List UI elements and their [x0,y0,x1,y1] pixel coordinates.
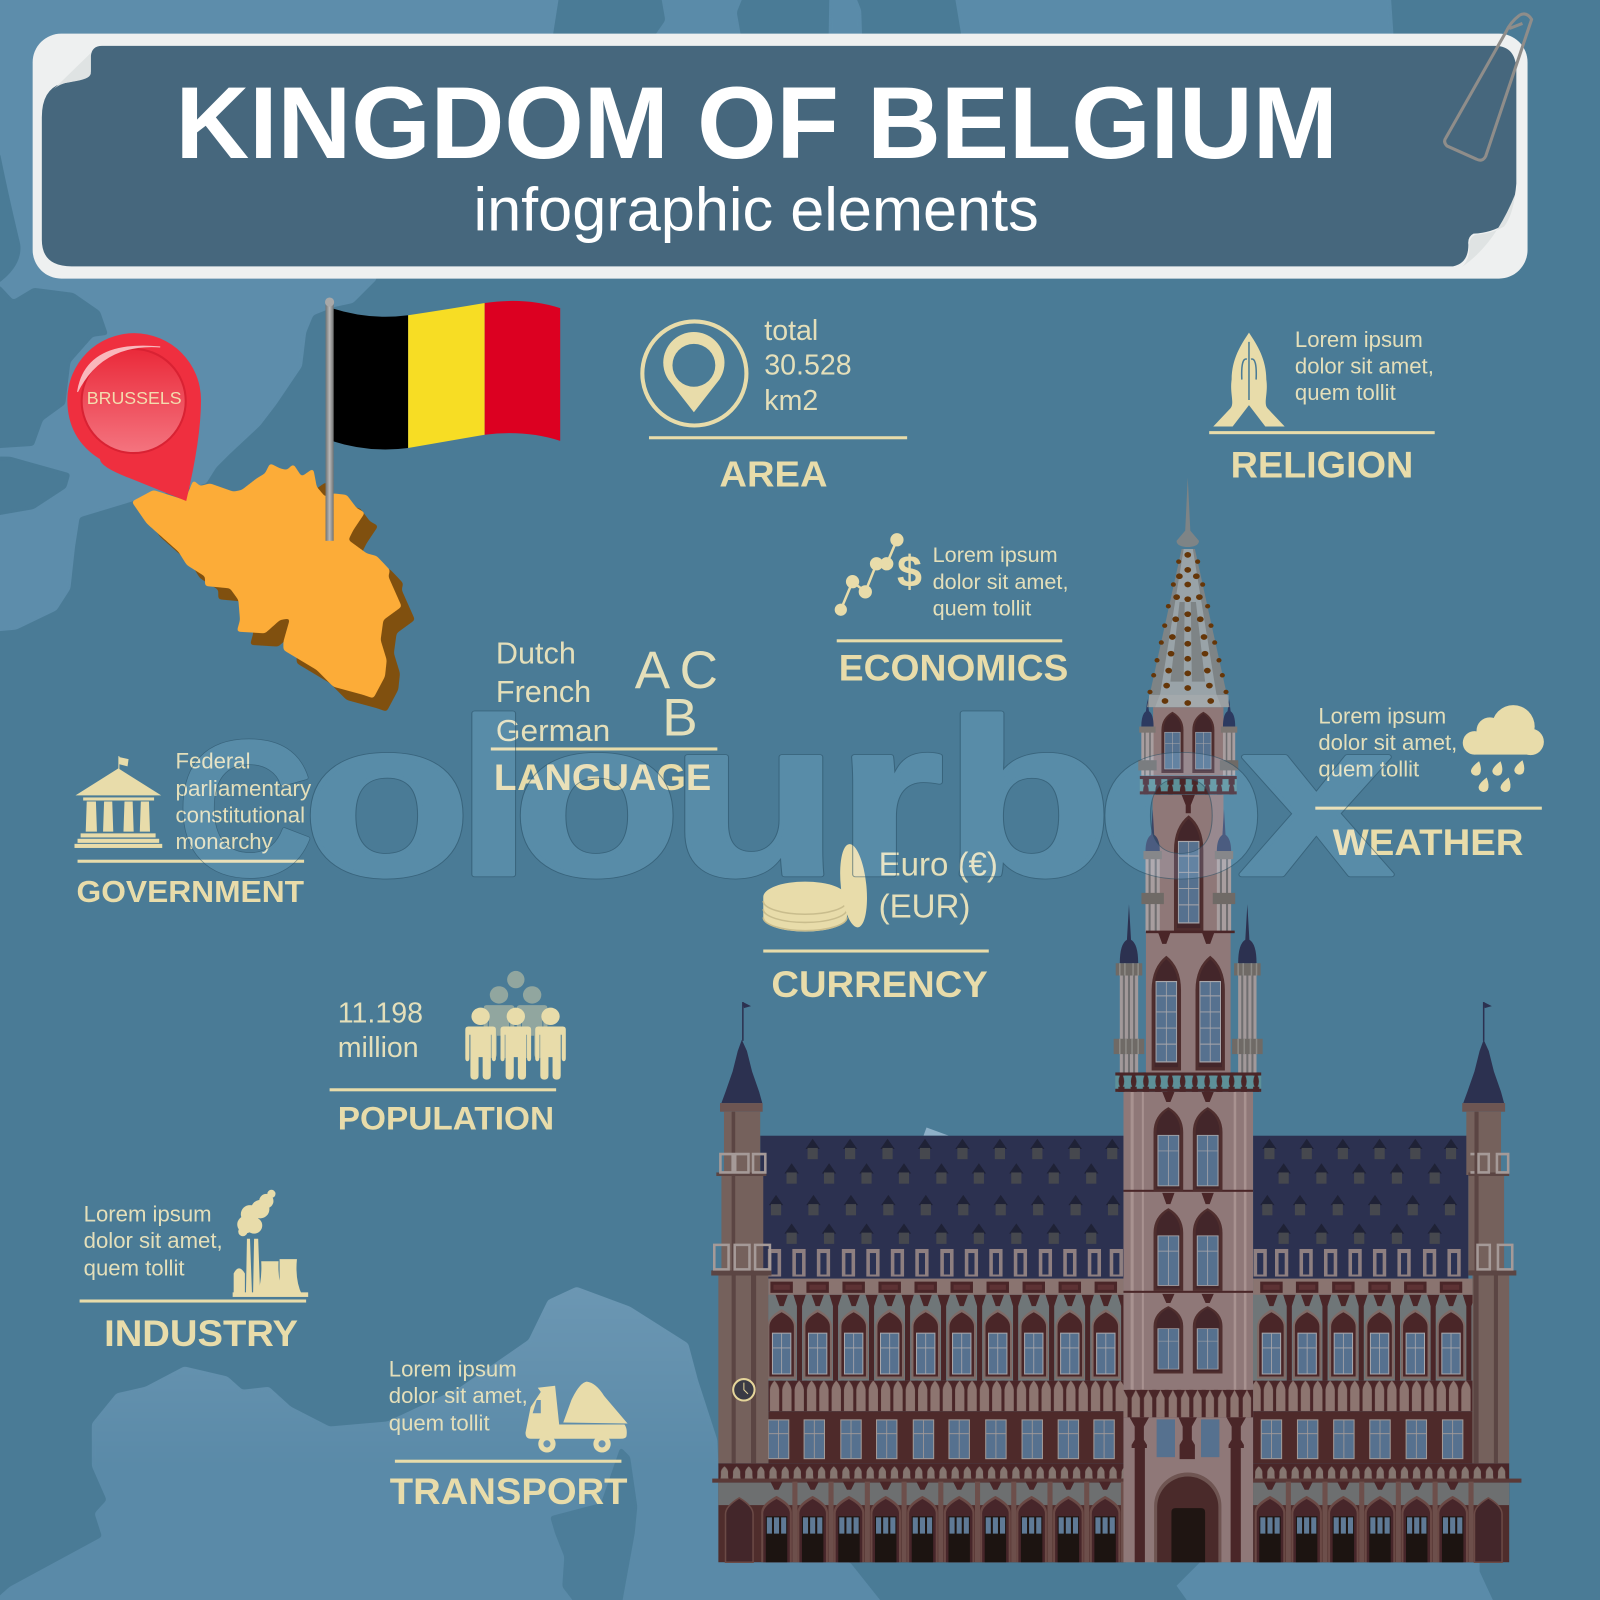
area divider [649,436,907,439]
page curl top left [53,53,91,90]
government text: parliamentary [176,776,312,801]
pin disc [82,349,186,453]
government divider [78,860,304,863]
language list: German [496,714,610,748]
spire studs [1147,552,1229,706]
title: KINGDOM OF BELGIUM [176,66,1338,180]
map of Belgium [132,463,415,712]
flag black stripe [332,308,408,449]
religion heading: RELIGION [1231,445,1413,486]
illustration: Brussels Town Hall [711,478,1521,1562]
language list: French [496,675,591,709]
panel: weather [1315,703,1544,863]
panel: language [491,636,718,798]
transport heading: TRANSPORT [390,1471,628,1512]
left corner turret [711,1002,771,1463]
location pin: Brussels [67,333,201,501]
transport divider [395,1460,621,1463]
panel: currency [763,843,998,1005]
icon: praying hands [1213,333,1285,427]
page curl bottom right [1461,194,1515,267]
icon: letters A B C: B [662,689,698,748]
left wing [712,1136,1130,1562]
weather divider [1315,807,1542,810]
watermark [182,710,1395,880]
population divider [330,1088,556,1091]
flag yellow stripe [408,303,485,448]
panel: population [330,971,566,1137]
pin label: BRUSSELS [87,388,182,408]
panel: area [642,315,907,495]
flag pole [326,303,334,541]
flag of Belgium [325,297,560,541]
weather text: quem tollit [1318,757,1419,782]
icon: group of people [465,971,566,1080]
map surface [132,463,402,698]
government text: monarchy [176,829,274,854]
government text: constitutional [176,802,305,827]
currency divider [763,949,989,953]
language list: Dutch [496,636,576,670]
icon: factory [233,1190,308,1297]
population heading: POPULATION [338,1100,554,1137]
industry text: dolor sit amet, [84,1228,223,1253]
icon: rising chart with dollar: $ [897,546,922,597]
government text: Federal [176,748,251,773]
icon: letters A B C: A [635,641,671,700]
pole knob [325,297,334,307]
panel: economics [835,533,1068,689]
area heading: AREA [719,455,828,495]
right wing [1248,1136,1521,1562]
population value: million [338,1032,419,1064]
panel: government [74,748,312,909]
economics divider [837,639,1062,642]
economics text: quem tollit [933,595,1031,620]
panel: religion [1209,327,1435,486]
icon: rain cloud [1463,705,1544,792]
icon: area pin [642,321,746,426]
banner paper [33,34,1528,279]
industry divider [80,1299,306,1303]
industry text: quem tollit [84,1256,185,1281]
pin body [67,333,201,501]
panel: transport [389,1357,628,1512]
belfry tower [1114,699,1263,1072]
icon: dump truck [526,1382,628,1453]
banner dark panel [42,46,1516,266]
industry heading: INDUSTRY [104,1313,298,1354]
religion text: quem tollit [1295,380,1396,405]
language divider [491,747,717,751]
watermark: olourbox [302,674,1393,922]
transport text: quem tollit [389,1411,490,1436]
government heading: GOVERNMENT [77,875,304,909]
icon: paper clip [1445,14,1532,160]
balcony [1115,1072,1261,1092]
spire [1147,478,1230,707]
map extrusion shadow [145,477,415,712]
icon: parliament building [74,756,162,848]
watermark: C [177,702,313,916]
economics heading: ECONOMICS [839,648,1068,689]
currency heading: CURRENCY [771,964,988,1005]
area value: 30.528 [764,349,852,381]
weather heading: WEATHER [1333,822,1523,863]
title banner [33,14,1532,279]
religion text: Lorem ipsum [1295,327,1423,352]
flag red stripe [485,301,560,441]
right corner turret [1462,1002,1516,1463]
economics text: Lorem ipsum [933,542,1058,567]
area value: km2 [764,385,818,417]
currency text: Euro (€) [879,847,998,884]
economics text: dolor sit amet, [933,569,1068,594]
panel: industry [80,1190,308,1354]
area value: total [764,315,818,347]
currency text: (EUR) [879,888,970,925]
central tower base [1123,1092,1253,1562]
subtitle: infographic elements [473,176,1039,244]
religion divider [1209,431,1435,434]
weather text: dolor sit amet, [1318,730,1457,755]
language heading: LANGUAGE [494,757,711,798]
religion text: dolor sit amet, [1295,353,1434,378]
population value: 11.198 [338,997,423,1029]
industry text: Lorem ipsum [84,1201,212,1226]
transport text: Lorem ipsum [389,1357,517,1382]
transport text: dolor sit amet, [389,1383,528,1408]
icon: coins [763,843,871,932]
icon: letters A B C: C [680,641,718,700]
pin highlight [78,346,160,392]
clock [733,1379,755,1401]
weather text: Lorem ipsum [1318,703,1446,728]
icon: rising chart with dollar [835,533,922,616]
